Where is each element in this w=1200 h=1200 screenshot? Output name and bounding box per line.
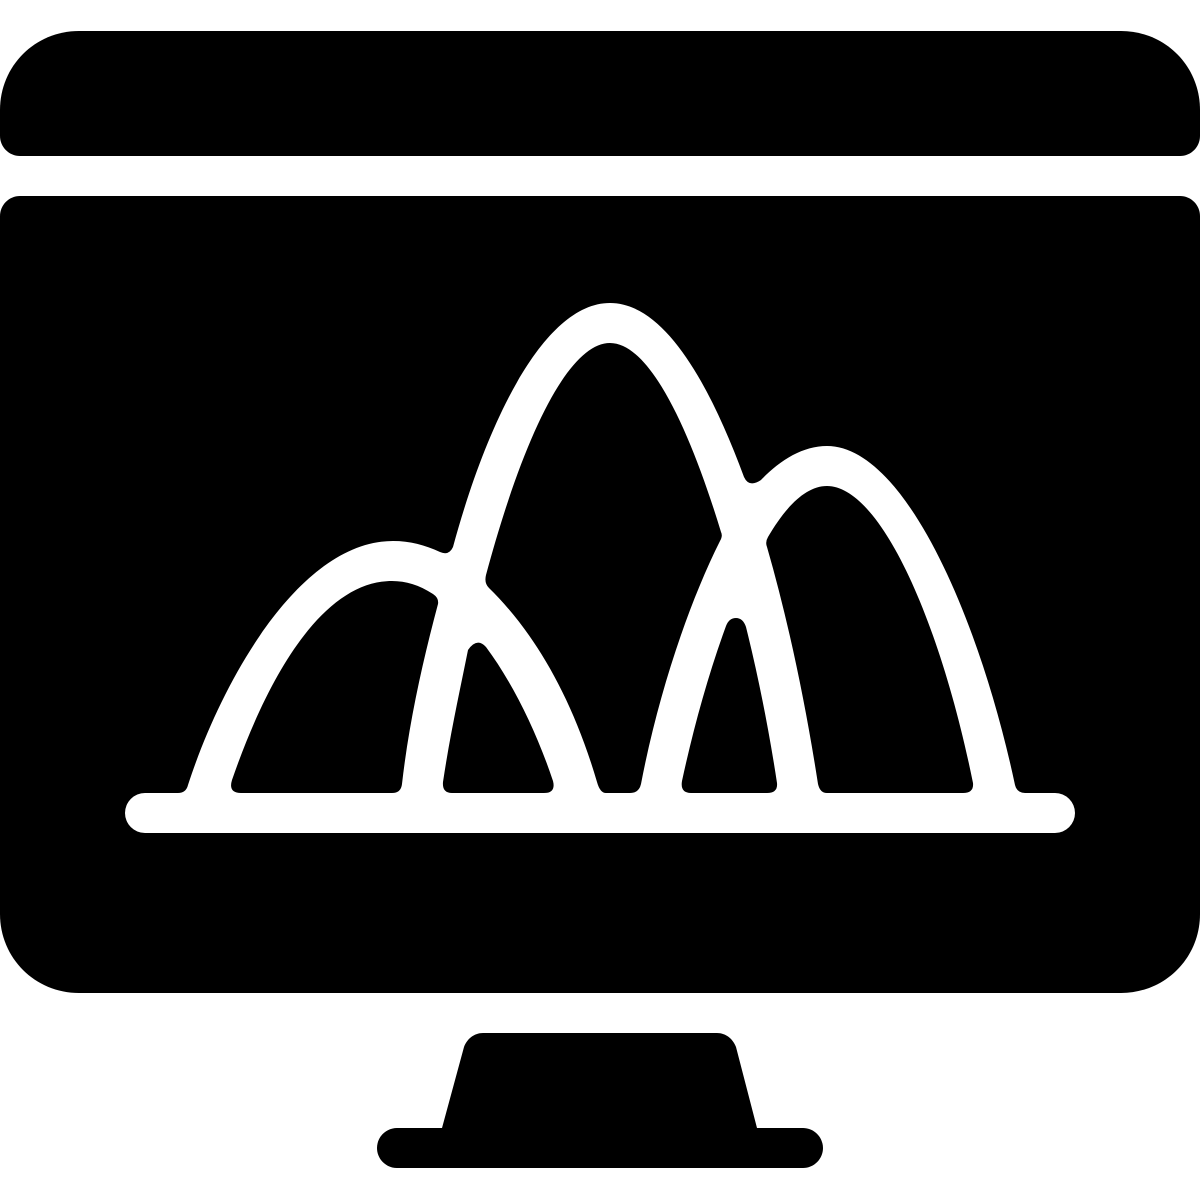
top window bar: [0, 31, 1200, 156]
monitor stand: [377, 1033, 823, 1168]
monitor screen panel: [0, 196, 1200, 993]
chart: overlapping bell curves on baseline: [125, 303, 1075, 833]
